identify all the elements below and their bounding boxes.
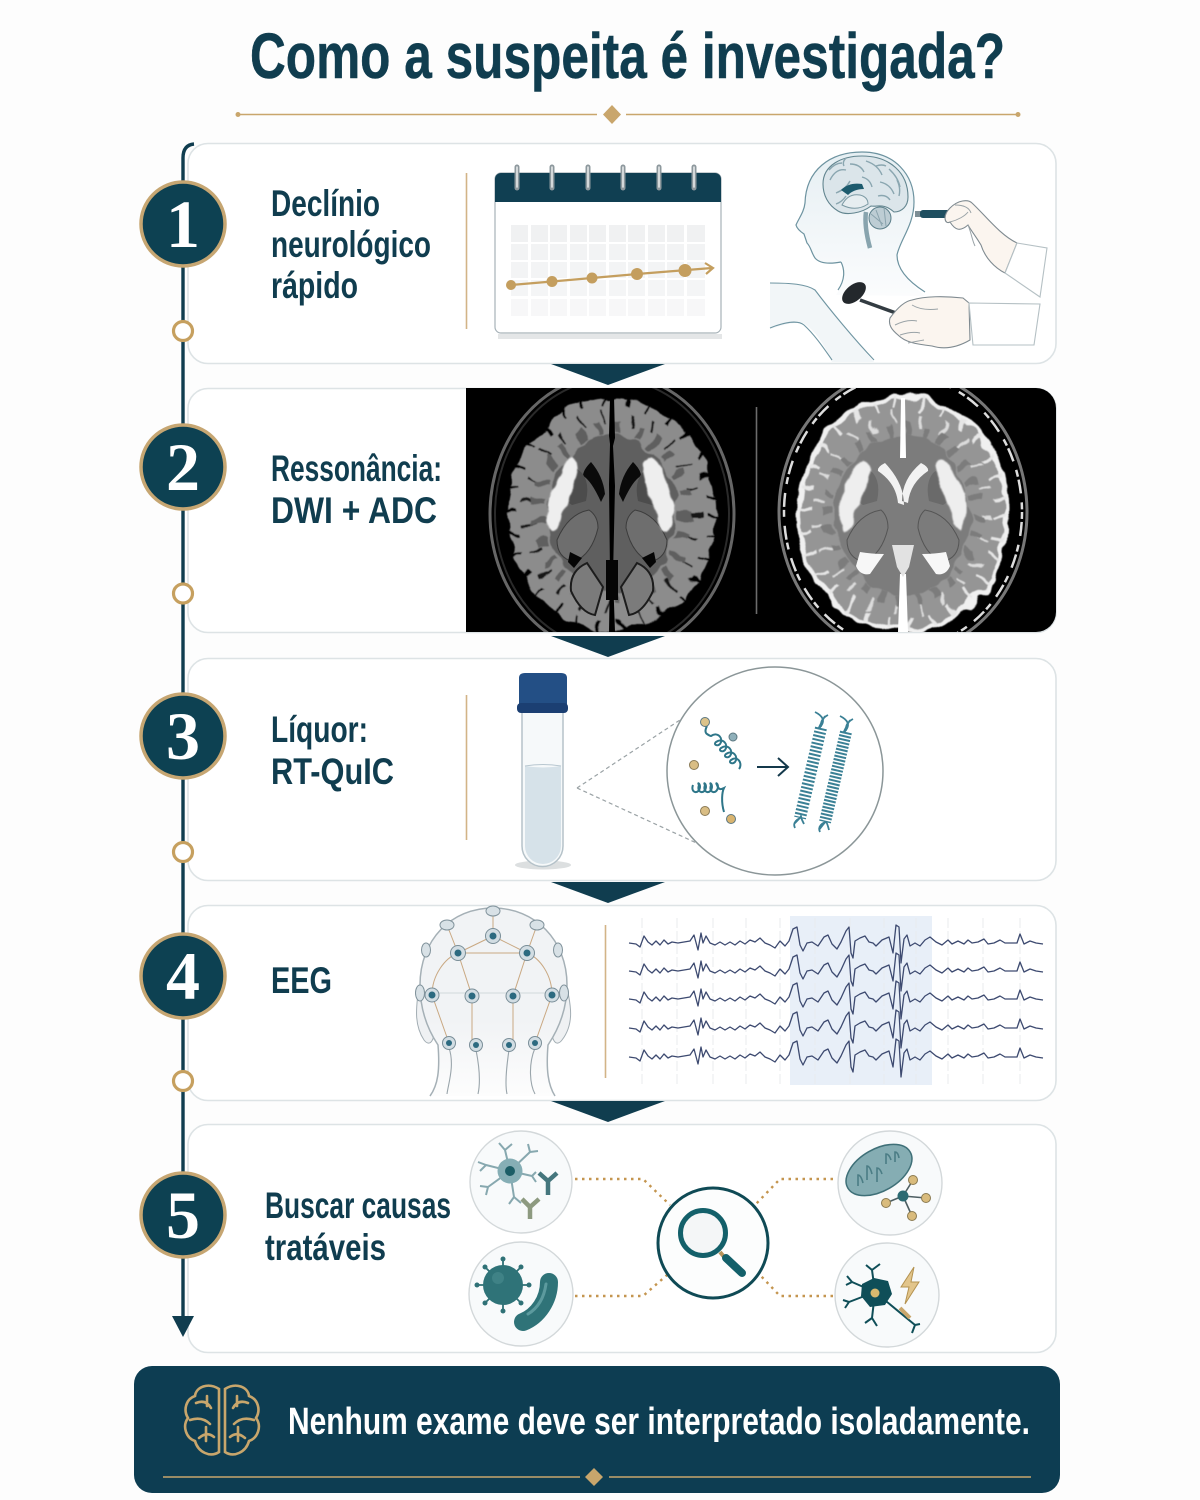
icon: virus and bacterium — [469, 1242, 573, 1346]
step 1 divider — [466, 173, 468, 329]
icon: mitochondrion and molecule — [837, 1131, 942, 1235]
step 1 heading: neurológico — [271, 224, 431, 265]
step badge 4: 4 — [166, 938, 200, 1014]
timeline ring 1 — [174, 322, 192, 340]
panel: step 3 card — [188, 658, 1056, 880]
arrow: connector 1 to 2 — [551, 364, 665, 385]
step 1 heading: rápido — [271, 265, 358, 306]
icon: golden brain — [185, 1386, 259, 1454]
MRI: DWI brain — [488, 388, 736, 632]
illustration: neurological exam — [770, 152, 1047, 362]
illustration: EEG cap on head — [416, 906, 571, 1096]
step 1 heading — [271, 183, 431, 306]
panel: step 4 card — [188, 906, 1056, 1100]
icon: magnifying glass — [658, 1188, 768, 1298]
timeline ring 4 — [174, 1072, 192, 1090]
panel: conclusion banner — [134, 1366, 1060, 1493]
title: Como a suspeita é investigada? — [250, 20, 1005, 92]
timeline ring 2 — [174, 584, 192, 603]
chart: EEG traces — [629, 916, 1043, 1085]
panel: step 1 card — [188, 144, 1056, 364]
patient shoulder — [770, 283, 874, 362]
step 3 heading — [271, 709, 394, 792]
step 5 heading — [265, 1185, 451, 1268]
panel: MRI images DWI and ADC — [466, 388, 1056, 632]
step 1 heading: Declínio — [271, 183, 380, 224]
arrow: vertical timeline — [172, 144, 194, 1337]
step 3 divider — [466, 695, 468, 840]
step 4 heading: EEG — [271, 960, 332, 1001]
dotted connectors to causes — [575, 1179, 833, 1296]
step badge 5 — [141, 1173, 225, 1257]
step badge 1 — [141, 182, 225, 266]
icon: test tube — [515, 673, 571, 870]
title divider — [236, 105, 1020, 124]
step badge 2 — [141, 425, 225, 509]
banner divider — [163, 1468, 1031, 1486]
step badge 2: 2 — [166, 429, 200, 505]
arrow: connector 2 to 3 — [551, 636, 665, 657]
step badge 3: 3 — [166, 698, 200, 774]
pen light and hand — [915, 201, 1047, 297]
timeline ring 3 — [174, 842, 192, 862]
icon: autoimmune neuron and antibodies — [470, 1131, 572, 1233]
dashed zoom lines — [577, 720, 703, 846]
icon: calendar with rising line — [495, 167, 722, 339]
step 2 heading — [271, 448, 442, 531]
reflex hammer and hand — [838, 278, 1040, 348]
step badge 4 — [141, 934, 225, 1018]
arrow: connector 3 to 4 — [551, 882, 665, 903]
step 3 heading: Líquor: — [271, 709, 368, 750]
step 5 heading: Buscar causas — [265, 1185, 451, 1226]
step 5 heading: tratáveis — [265, 1227, 386, 1268]
step badge 1: 1 — [166, 186, 200, 262]
step badge 5: 5 — [166, 1177, 200, 1253]
step 4 divider — [604, 925, 606, 1078]
step 2 heading: Ressonância: — [271, 448, 442, 489]
panel: step 2 card — [188, 388, 1056, 632]
divider between images — [756, 407, 758, 614]
arrow: connector 4 to 5 — [551, 1101, 665, 1122]
head profile with brain — [796, 152, 925, 296]
illustration: prion magnified circle — [667, 667, 883, 875]
panel: step 5 card — [188, 1124, 1056, 1352]
step 3 heading: RT-QuIC — [271, 751, 394, 792]
MRI: ADC brain — [778, 388, 1028, 632]
step 2 heading: DWI + ADC — [271, 490, 437, 531]
step badge 3 — [141, 694, 225, 778]
icon: neuron and electric bolt — [835, 1243, 939, 1347]
